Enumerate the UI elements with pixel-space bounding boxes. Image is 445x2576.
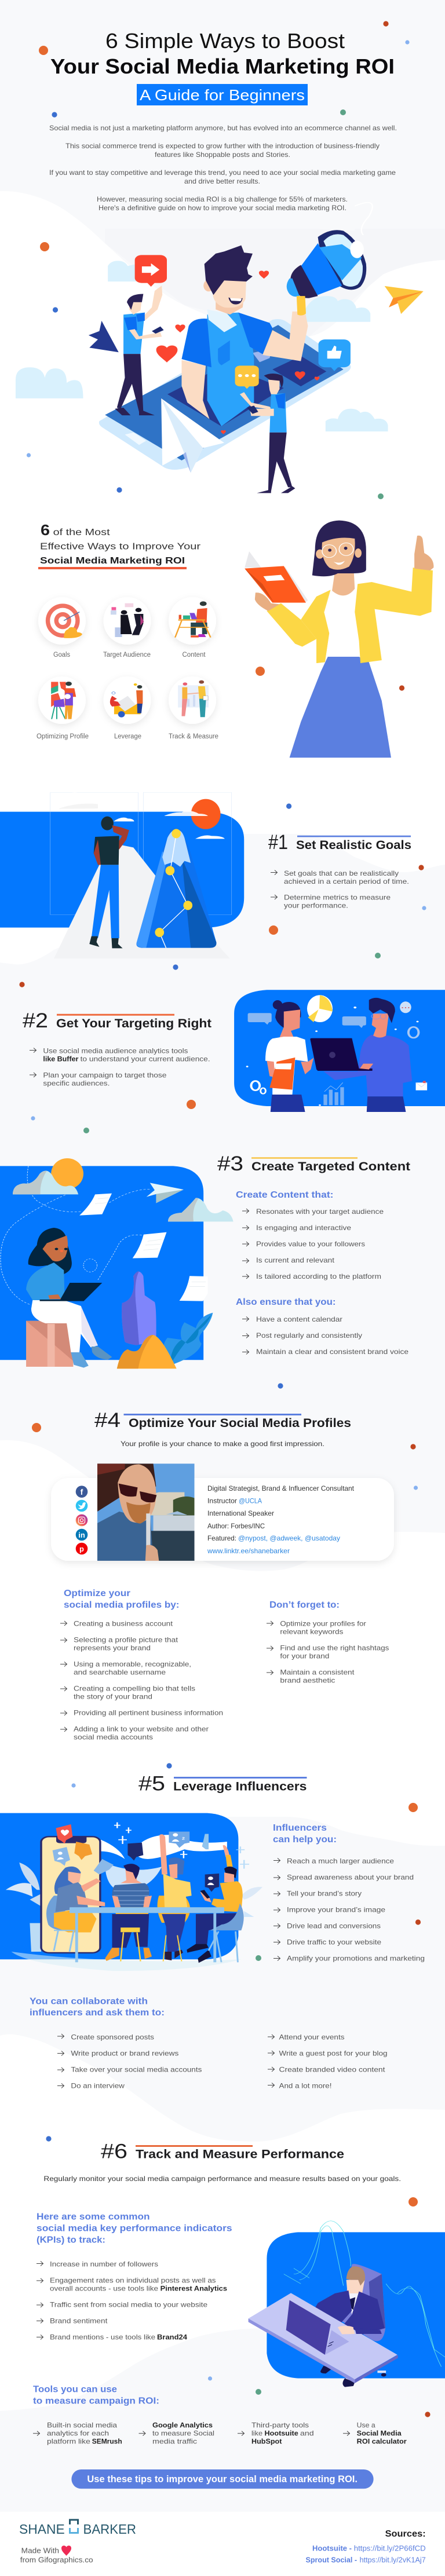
icon labels: Goals	[53, 652, 70, 658]
list: optimize your social media profiles by: Using a memorable, recognizable,	[74, 1660, 191, 1668]
list: create content that: Is current and relevant	[256, 1256, 335, 1264]
woman	[265, 1000, 313, 1112]
icon: goals	[38, 597, 86, 645]
title: 6 Simple Ways to Boost	[105, 29, 345, 53]
bullets 2: Plan your campaign to target those	[43, 1071, 167, 1080]
logo: Shane Barker: SHANE	[19, 2522, 65, 2537]
list: create content that	[236, 1190, 384, 1280]
section 5 heading	[138, 1773, 307, 1795]
woman	[26, 1228, 112, 1368]
intro paragraph: If you want to stay competitive and leverage this trend, you need to ace your social media marketing game	[49, 169, 396, 177]
tool: third-party tools: like	[251, 2429, 262, 2437]
tool: third-party tools: HubSpot	[251, 2437, 282, 2445]
tool: third-party tools: Third-party tools	[251, 2421, 309, 2429]
tool: google analytics: Google Analytics	[152, 2421, 213, 2429]
icon labels: Track & Measure	[169, 733, 218, 740]
bullets 2: to understand your current audience.	[81, 1055, 210, 1063]
title	[50, 29, 395, 78]
icon: target audience	[103, 597, 151, 645]
hearts	[156, 270, 319, 434]
list: optimize your social media profiles by: Creating a compelling bio that tells	[74, 1685, 195, 1693]
list: collaborate with influencers: Write a guest post for your blog	[279, 2049, 387, 2057]
heading 1: Set Realistic Goals	[296, 839, 411, 852]
intro paragraph: This social commerce trend is expected to grow further with the introduction of business-friendly	[65, 142, 380, 150]
sources: Sources:	[385, 2529, 426, 2539]
tool: built-in analytics: SEMrush	[92, 2437, 122, 2445]
paper plane white	[161, 398, 224, 473]
bullets 1: your performance.	[284, 902, 348, 910]
tool: built-in analytics	[33, 2421, 122, 2445]
section heading: 6 of the most effective ways: 6	[41, 521, 50, 539]
tool: google analytics: media traffic	[152, 2437, 197, 2445]
small man right	[240, 374, 295, 493]
list: collaborate with influencers: You can collaborate with	[30, 1997, 148, 2007]
list: optimize your social media profiles by: Adding a link to your website and other	[74, 1725, 209, 1733]
list: optimize your social media profiles by: Providing all pertinent business information	[74, 1709, 223, 1717]
icon labels	[37, 652, 218, 740]
tool: third-party tools: Hootsuite	[264, 2429, 298, 2437]
woman in phone	[46, 1859, 114, 1952]
intro paragraph: and drive better results.	[184, 177, 260, 185]
tool: ROI calculator	[343, 2421, 407, 2445]
section 3 illustration: woman with laptop and flying papers	[0, 1158, 234, 1368]
bullets 2: like Buffer	[43, 1055, 79, 1063]
section 4 heading: Your profile is your chance to make a good first impression.	[121, 1440, 324, 1448]
list: key performance indicators: Brand24	[157, 2333, 187, 2341]
tools section	[33, 2385, 407, 2445]
bullets 2: specific audiences.	[43, 1080, 110, 1088]
heading 2: Get Your Targeting Right	[56, 1017, 211, 1030]
heading 3: #3	[217, 1152, 243, 1175]
profile text: @UCLA	[239, 1497, 262, 1505]
footer	[19, 2519, 426, 2564]
icon: leverage	[103, 676, 151, 724]
box	[26, 1321, 73, 1367]
list: key performance indicators: overall accounts - use tools like	[50, 2284, 158, 2292]
section heading: 6 of the most effective ways: of the Most	[53, 528, 110, 537]
profile text: International Speaker	[207, 1509, 274, 1517]
tools heading: to measure campaign ROI:	[33, 2396, 159, 2406]
small man left	[115, 286, 164, 415]
section 5 text	[30, 1823, 425, 2090]
list: also ensure that you: Also ensure that you:	[236, 1297, 336, 1307]
sources: https://bit.ly/2P66fCD	[354, 2544, 426, 2553]
feet	[320, 2366, 386, 2387]
list: key performance indicators: Brand sentiment	[50, 2317, 108, 2325]
chair	[341, 2264, 385, 2341]
profile text: Digital Strategist, Brand & Influencer Consultant	[207, 1484, 355, 1492]
tool: ROI calculator: Social Media	[357, 2429, 402, 2437]
list: optimize your social media profiles by: represents your brand	[74, 1644, 151, 1652]
desk	[249, 2293, 398, 2383]
list: key performance indicators: Engagement rates on individual posts as well as	[50, 2276, 216, 2284]
social icons: p	[79, 1545, 84, 1553]
sources	[306, 2529, 426, 2564]
icon labels: Optimizing Profile	[37, 733, 89, 740]
icon: content	[169, 597, 216, 645]
phone	[41, 1836, 100, 1953]
list: don't forget to: for your brand	[280, 1652, 329, 1660]
list: key performance indicators: Brand mentions - use tools like	[50, 2333, 155, 2341]
list: create content that: Resonates with your target audience	[256, 1208, 384, 1216]
tool: built-in analytics: analytics for each	[47, 2429, 109, 2437]
list: create content that: Is engaging and interactive	[256, 1224, 351, 1232]
clouds	[16, 261, 388, 431]
intro paragraph: Here's a definitive guide on how to improve your social media marketing ROI.	[99, 204, 346, 212]
bullets 2: Use social media audience analytics tools	[43, 1047, 188, 1055]
tool: third-party tools	[238, 2421, 314, 2445]
list: influencers can help you	[273, 1823, 425, 1962]
icon labels: Leverage	[114, 733, 141, 740]
section heading: 6 of the most effective ways	[38, 521, 201, 569]
reaction bubbles	[135, 255, 351, 389]
list: optimize your social media profiles by: social media accounts	[74, 1733, 153, 1741]
list: don't forget to: Optimize your profiles for	[280, 1620, 366, 1628]
profile text: Author: Forbes/INC	[207, 1522, 265, 1530]
heading 3	[217, 1152, 410, 1175]
list: optimize your social media profiles by: and searchable username	[74, 1668, 166, 1677]
subtitle banner	[137, 84, 308, 105]
list: key performance indicators: Traffic sent from social media to your website	[50, 2300, 207, 2308]
tools heading	[33, 2385, 159, 2406]
section 6 heading: Regularly monitor your social media campaign performance and measure results based on your goals.	[43, 2175, 401, 2183]
woman raising hand	[158, 1834, 192, 1962]
sources: Hootsuite -	[312, 2544, 352, 2553]
orange hills	[117, 1335, 177, 1368]
main man	[181, 246, 308, 426]
intro paragraph: However, measuring social media ROI is a big challenge for 55% of marketers.	[97, 195, 348, 203]
list: influencers can help you: Tell your brand’s story	[287, 1889, 362, 1897]
list: create content that: Is tailored according to the platform	[256, 1272, 381, 1280]
intro paragraph: Social media is not just a marketing platform anymore, but has evolved into an ecommerce channel as well.	[49, 124, 397, 132]
section heading: 6 of the most effective ways: Effective Ways to Improve Your	[40, 542, 201, 552]
list: influencers can help you: Spread awareness about your brand	[287, 1873, 414, 1881]
list: collaborate with influencers: Take over your social media accounts	[71, 2065, 202, 2073]
bullets 1: Determine metrics to measure	[284, 894, 391, 902]
plus signs	[114, 1823, 249, 1869]
profile text	[207, 1484, 355, 1555]
tool: google analytics: to measure Social	[152, 2429, 214, 2437]
made with credit: from Gifographics.co	[20, 2556, 93, 2564]
like and share bubbles: 2	[182, 1836, 185, 1840]
section 2 illustration: two people with laptop	[234, 990, 445, 1112]
man with stripes	[105, 1864, 152, 1962]
profile text: Featured:	[207, 1534, 236, 1542]
section 2 text	[23, 1009, 211, 1088]
intro paragraph	[49, 124, 397, 212]
intro paragraph: features like Shoppable posts and Stories.	[155, 151, 290, 159]
list: influencers can help you: Influencers	[273, 1823, 327, 1833]
illustration: woman holding a book	[245, 521, 433, 758]
planes	[89, 321, 119, 352]
table	[70, 1907, 224, 1962]
list: also ensure that you	[236, 1297, 408, 1356]
list: optimize your social media profiles by: social media profiles by:	[64, 1600, 180, 1610]
tool: built-in analytics: platform like	[47, 2437, 90, 2445]
tool: built-in analytics: Built-in social media	[47, 2421, 117, 2429]
section 5 heading: #5	[138, 1773, 165, 1795]
list: key performance indicators: Here are some common	[37, 2212, 150, 2222]
man on right	[187, 1845, 244, 1963]
tool: third-party tools: and	[300, 2429, 314, 2437]
megaphone	[287, 230, 366, 316]
list: optimize your social media profiles by: the story of your brand	[74, 1693, 152, 1701]
social icons: f	[81, 1487, 83, 1496]
logo: Shane Barker	[19, 2519, 136, 2537]
list: also ensure that you: Post regularly and consistently	[256, 1331, 362, 1340]
profile text: Instructor	[207, 1497, 237, 1505]
list: don't forget to: Find and use the right hashtags	[280, 1644, 389, 1652]
list: collaborate with influencers: influencers and ask them to:	[30, 2008, 165, 2018]
tools heading: Tools you can use	[33, 2385, 117, 2395]
section 1 illustration: climbing a mountain	[0, 780, 244, 958]
sources: Sprout Social -	[306, 2556, 357, 2564]
made with credit: Made With	[21, 2546, 59, 2555]
call to action button	[71, 2469, 374, 2489]
hero illustration: man with megaphone on a phone	[16, 203, 445, 493]
icon labels: Target Audience	[103, 652, 151, 658]
list: optimize your social media profiles by	[60, 1589, 223, 1741]
phone	[99, 319, 351, 470]
bullets 1: achieved in a certain period of time.	[284, 877, 409, 885]
list: don't forget to: Maintain a consistent	[280, 1668, 355, 1677]
heading 1	[268, 831, 411, 854]
bullets 2	[30, 1047, 210, 1088]
call to action button: Use these tips to improve your social media marketing ROI.	[87, 2474, 358, 2484]
heading 3: Create Targeted Content	[251, 1160, 410, 1173]
laptop	[286, 2300, 382, 2355]
laptop	[310, 1038, 373, 1071]
section 3 text	[217, 1152, 410, 1356]
list: create content that: Create Content that:	[236, 1190, 334, 1200]
list: don't forget to: Don’t forget to:	[269, 1600, 340, 1610]
section 4 heading: #4	[94, 1409, 121, 1432]
list: influencers can help you: Improve your brand’s image	[287, 1905, 385, 1913]
bullets 1: Set goals that can be realistically	[284, 869, 399, 877]
hiker	[89, 817, 129, 948]
list: influencers can help you: Reach a much larger audience	[287, 1857, 394, 1865]
thumbs up	[122, 1272, 156, 1345]
profile text: www.linktr.ee/shanebarker	[207, 1547, 290, 1555]
title: Your Social Media Marketing ROI	[50, 54, 395, 78]
list: create content that: Provides value to your followers	[256, 1240, 365, 1248]
section heading: 6 of the most effective ways: Social Media Marketing ROI	[40, 556, 185, 566]
list: optimize your social media profiles by: Selecting a profile picture that	[74, 1636, 178, 1644]
tool: ROI calculator: Use a	[357, 2421, 375, 2429]
like and share bubbles	[53, 1824, 219, 1892]
section 1 text	[268, 831, 411, 910]
list: influencers can help you: can help you:	[273, 1835, 337, 1845]
section 5 illustration: people at a table and a phone	[0, 1813, 262, 1971]
section 6 heading	[43, 2140, 401, 2183]
list: influencers can help you: Drive traffic to your website	[287, 1938, 381, 1946]
list: collaborate with influencers: Create sponsored posts	[71, 2033, 154, 2041]
heading 1: #1	[268, 831, 288, 854]
man	[323, 998, 412, 1112]
section 6 illustration: man at a desk with laptop	[249, 2221, 445, 2387]
list: also ensure that you: Have a content calendar	[256, 1315, 342, 1323]
icon: optimizing profile	[38, 676, 86, 724]
heading 2: #2	[23, 1009, 48, 1032]
list: key performance indicators	[37, 2212, 232, 2341]
section 4 heading	[94, 1409, 351, 1448]
tool: google analytics	[139, 2421, 214, 2445]
subtitle banner: A Guide for Beginners	[140, 86, 305, 104]
list: don't forget to	[267, 1600, 389, 1685]
icon grid: six ways	[37, 597, 218, 740]
section 5 heading: Leverage Influencers	[173, 1780, 307, 1794]
plants	[6, 1863, 262, 1952]
list: collaborate with influencers: Do an interview	[71, 2081, 125, 2090]
section 6 heading: Track and Measure Performance	[136, 2148, 344, 2161]
sources: https://bit.ly/2vK1Aj7	[360, 2556, 426, 2564]
list: key performance indicators: social media key performance indicators	[37, 2224, 232, 2234]
chart and icons	[251, 1081, 427, 1105]
icon: track and measure	[169, 676, 216, 724]
list: collaborate with influencers: Create branded video content	[279, 2065, 385, 2073]
list: don't forget to: relevant keywords	[280, 1628, 343, 1636]
logo: Shane Barker: BARKER	[83, 2522, 136, 2537]
heading 2	[23, 1009, 211, 1032]
list: key performance indicators: Increase in number of followers	[50, 2260, 158, 2268]
list: influencers can help you: Amplify your promotions and marketing	[287, 1954, 425, 1962]
list: also ensure that you: Maintain a clear and consistent brand voice	[256, 1348, 408, 1356]
list: collaborate with influencers: Write product or brand reviews	[71, 2049, 178, 2057]
leaf	[164, 1313, 213, 1365]
list: collaborate with influencers: And a lot more!	[279, 2081, 331, 2090]
list: key performance indicators: (KPIs) to track:	[37, 2235, 105, 2245]
profile photo	[97, 1463, 195, 1561]
section 4 heading: Optimize Your Social Media Profiles	[129, 1417, 351, 1430]
list: influencers can help you: Drive lead and conversions	[287, 1922, 381, 1930]
social icons: in	[78, 1531, 85, 1539]
list: collaborate with influencers	[30, 1997, 387, 2090]
icon labels: Content	[182, 652, 206, 658]
list: optimize your social media profiles by: Creating a business account	[74, 1620, 173, 1628]
bullets 1	[271, 869, 409, 910]
list: collaborate with influencers: Attend your events	[279, 2033, 344, 2041]
list: don't forget to: brand aesthetic	[280, 1677, 335, 1685]
social icons	[76, 1485, 87, 1554]
made with credit	[20, 2546, 93, 2564]
section 6 heading: #6	[101, 2140, 127, 2163]
list: key performance indicators: Pinterest Analytics	[161, 2284, 227, 2292]
list: optimize your social media profiles by: Optimize your	[64, 1589, 130, 1598]
profile text: @nypost, @adweek, @usatoday	[238, 1534, 340, 1542]
profile card	[51, 1463, 394, 1561]
man	[312, 2266, 385, 2336]
tool: ROI calculator: ROI calculator	[357, 2437, 407, 2445]
